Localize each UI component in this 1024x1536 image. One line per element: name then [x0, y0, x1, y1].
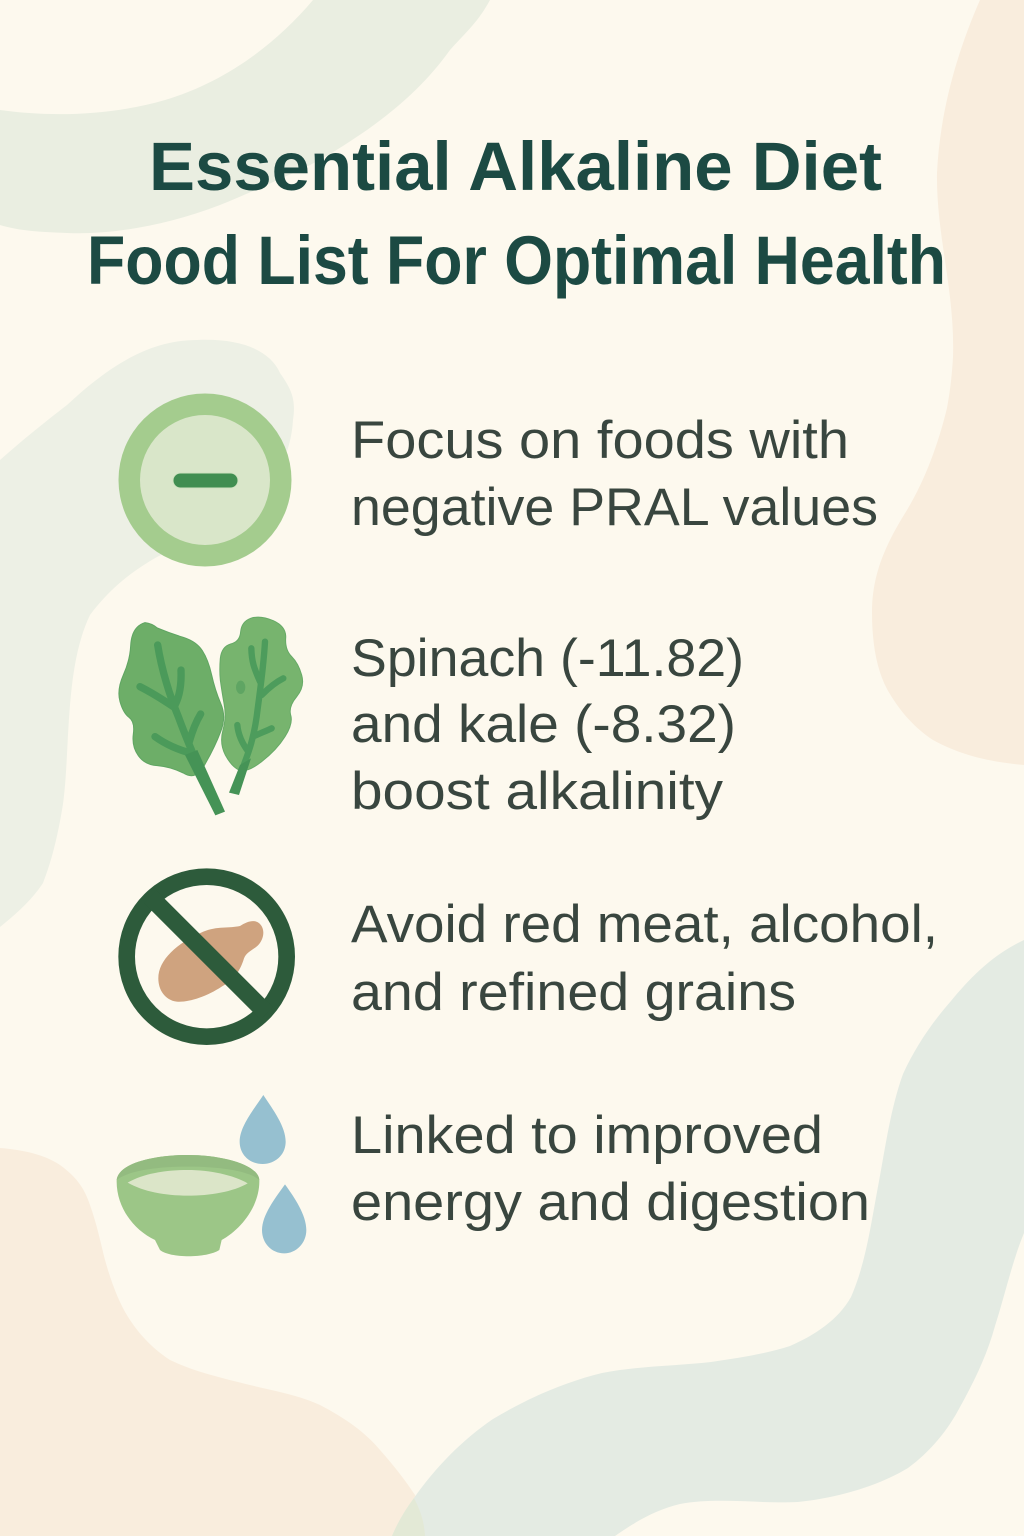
icon: bowl and drops [117, 1095, 306, 1256]
item: spinach and kale [119, 617, 744, 821]
text: avoid: and refined grains [351, 963, 796, 1022]
title [87, 128, 946, 299]
text: linked: energy and digestion [351, 1173, 870, 1232]
text: focus on foods [351, 411, 878, 537]
icon: prohibited meat [127, 877, 287, 1037]
text: spinach and kale: and kale (-8.32) [351, 695, 736, 754]
text: spinach and kale: boost alkalinity [351, 762, 724, 821]
text: spinach and kale: Spinach (-11.82) [351, 629, 744, 688]
text: linked: Linked to improved [351, 1106, 823, 1165]
title: Food List For Optimal Health [87, 222, 946, 299]
text: avoid [351, 895, 938, 1022]
text: linked [351, 1106, 870, 1232]
title: Essential Alkaline Diet [149, 128, 882, 205]
icon: minus circle [118, 394, 292, 566]
item: energy and digestion [117, 1095, 870, 1256]
text: spinach and kale [351, 629, 744, 821]
item: negative PRAL [118, 394, 878, 566]
icon: leaves [119, 617, 303, 815]
text: focus on foods: Focus on foods with [351, 411, 849, 470]
text: focus on foods: negative PRAL values [351, 478, 878, 537]
item: avoid [127, 877, 938, 1037]
text: avoid: Avoid red meat, alcohol, [351, 895, 938, 954]
